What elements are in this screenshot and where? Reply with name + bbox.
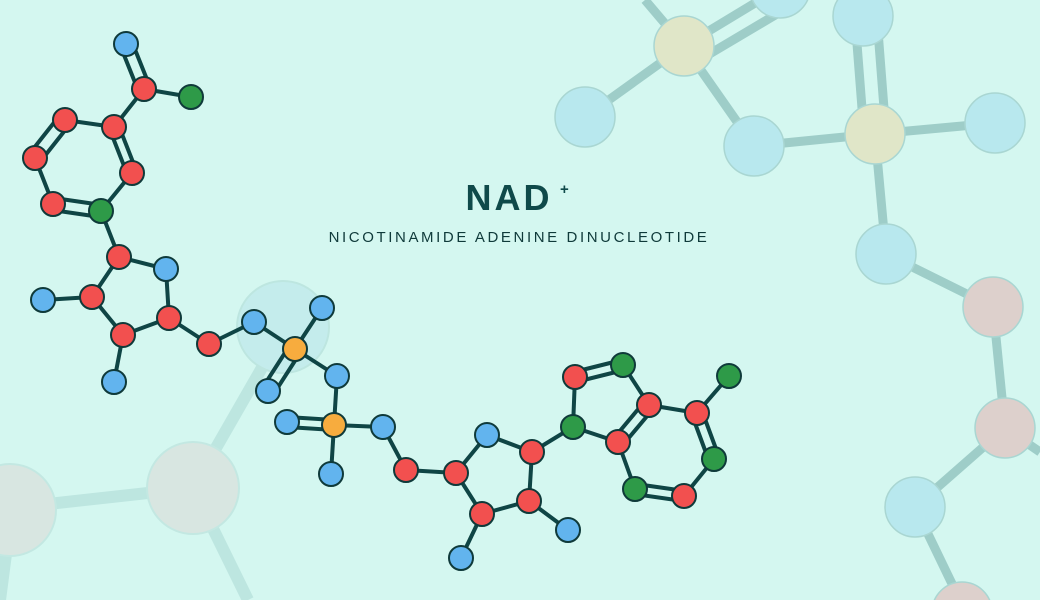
title: NAD xyxy=(466,177,552,218)
background faded molecule top right xyxy=(555,0,1040,600)
title: + xyxy=(560,181,569,198)
subtitle: NICOTINAMIDE ADENINE DINUCLEOTIDE xyxy=(329,229,709,246)
NAD+ molecule xyxy=(23,32,741,570)
background faded molecule bottom left xyxy=(0,281,329,600)
